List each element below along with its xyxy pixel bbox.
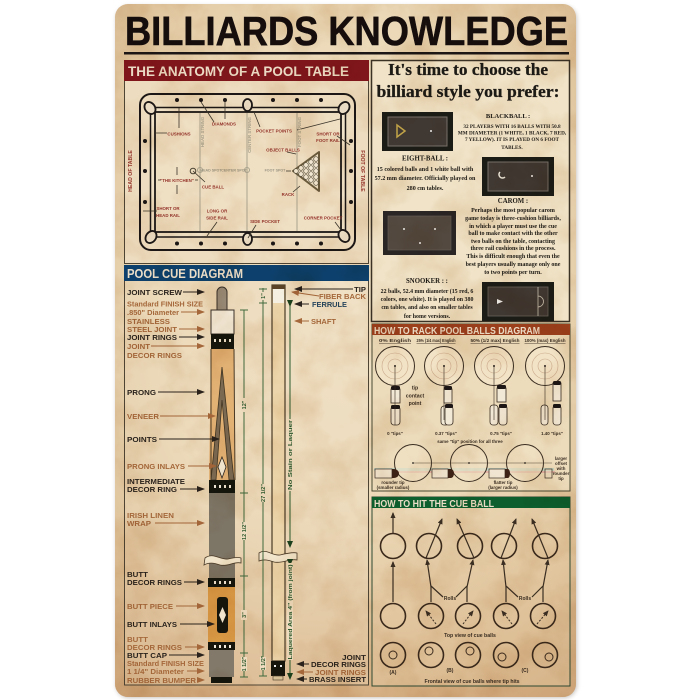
label: rolls <box>444 596 531 602</box>
pool table diagram: SHORT OR <box>156 206 180 211</box>
sign shadow <box>116 6 577 698</box>
text: carom: three rail cushions in the process. <box>470 246 556 252</box>
butt labels: JOINT SCREW <box>127 288 183 297</box>
frontal view cue balls <box>380 642 558 685</box>
rack column captions: 50% (1/2 max) English <box>470 338 520 343</box>
butt labels: INTERMEDIATE <box>127 477 185 486</box>
rack text: tip radius notes: rounder <box>553 471 570 476</box>
pool table diagram: CENTER STRING <box>247 116 252 153</box>
pool table diagram: SIDE RAIL <box>206 216 228 220</box>
pool table diagram: RACK <box>282 192 295 197</box>
cue ball circles: paths <box>380 534 558 558</box>
butt labels: STAINLESS <box>127 317 170 326</box>
shaft labels: FERRULE <box>312 300 347 309</box>
rack text: tip radius notes: flatter tip <box>494 480 513 485</box>
cue dimension lines <box>240 288 290 679</box>
rack column captions: 0% English <box>379 338 411 343</box>
rack text: tip contact point: contact <box>406 394 424 400</box>
butt labels: RUBBER BUMPER <box>127 676 197 685</box>
rack text: tips values: 1.40 "tips" <box>541 431 563 436</box>
frontal view cue balls: (A) <box>390 670 397 676</box>
heading: choose style: billiard style you prefer: <box>376 82 560 101</box>
shaft labels: JOINT RINGS <box>315 668 366 677</box>
butt labels: JOINT RINGS <box>127 333 177 342</box>
butt labels: DECOR RINGS <box>127 578 182 587</box>
text: carom: ball to make contact with the other <box>468 231 558 237</box>
butt labels: BUTT CAP <box>127 651 167 660</box>
pool table diagram: FOOT SPOT <box>265 168 286 172</box>
label: rolls: Rolls <box>444 596 456 602</box>
butt labels: DECOR RINGS <box>127 643 182 652</box>
butt labels <box>127 288 204 685</box>
text: eight-ball <box>375 156 476 192</box>
text: snooker: for home versions. <box>404 314 451 320</box>
cue diagram: assembled butt <box>204 287 241 683</box>
text: carom <box>465 198 561 276</box>
rack text: tip radius notes: rounder tip <box>381 480 405 485</box>
text: blackball: 32 PLAYERS WITH 16 BALLS WITH 50.8 <box>463 124 561 130</box>
butt labels: WRAP <box>127 519 151 528</box>
butt labels: Standard FINISH SIZE <box>127 300 203 308</box>
aged metal sign background <box>115 4 576 697</box>
pool table diagram: OBJECT BALLS <box>266 148 300 152</box>
frontal view cue balls: Frontal view of cue balls where tip hits <box>424 679 520 685</box>
rack text: tips values: 0 "tips" <box>387 431 403 436</box>
panel: pool cue diagram <box>124 265 369 685</box>
dimension labels: 1 1/2" <box>261 655 267 670</box>
butt labels: IRISH LINEN <box>127 511 174 520</box>
panel: how to hit the cue ball <box>372 497 570 686</box>
rack text: tips values <box>387 431 563 444</box>
shaft labels: TIP <box>354 285 366 294</box>
text: snooker: 22 balls, 52.4 mm diameter (15 red, 6 <box>381 288 473 295</box>
butt labels: Standard FINISH SIZE <box>127 659 204 668</box>
shaft labels: DECOR RINGS <box>311 660 366 669</box>
dimension labels: 12 1/2" <box>242 522 248 540</box>
cue diagram: shaft <box>259 285 297 680</box>
aged paper mottling overlay <box>115 4 576 697</box>
text: snooker: colors, one white). It is played on 380 <box>381 296 473 303</box>
dimension labels: 1" <box>261 293 267 299</box>
frontal view cue balls: (C) <box>522 668 529 674</box>
rack text: tip radius notes: offset <box>555 461 568 466</box>
rack text: tip radius notes: with <box>556 466 566 471</box>
rack text: tips values: same "tip" position for all three <box>437 439 503 444</box>
pool table diagram: FOOT STRING <box>297 116 302 147</box>
pool table diagram: POCKET POINTS <box>256 128 292 134</box>
heading: rack: HOW TO RACK POOL BALLS DIAGRAM <box>374 325 540 337</box>
text: snooker: cm tables, and also on smaller tables <box>381 305 473 311</box>
pool table diagram: CUSHIONS <box>167 132 191 136</box>
label: rolls: Rolls <box>519 596 531 602</box>
shaft labels: BRASS INSERT <box>309 675 366 684</box>
label: head of table: HEAD OF TABLE <box>128 150 134 192</box>
butt labels: VENEER <box>127 412 160 421</box>
rack column captions <box>379 338 566 343</box>
text: blackball: 7 YELLOW). IT IS PLAYED ON 6 FOOT <box>465 136 560 143</box>
label: foot of table: FOOT OF TABLE <box>359 150 365 192</box>
pool table diagram: SHORT OR <box>316 132 340 136</box>
shaft label arrows <box>292 289 353 679</box>
text: carom: game today is three-cushion billiards, <box>465 216 561 222</box>
table image: eight-ball <box>482 157 554 196</box>
text: eight-ball: EIGHT-BALL : <box>402 156 448 162</box>
panel: how to rack pool balls <box>372 324 570 491</box>
rack column captions: 25% (1/4 max) English <box>416 338 456 343</box>
table image: blackball <box>382 112 453 151</box>
text: blackball <box>458 113 567 151</box>
shaft labels: JOINT <box>342 653 366 662</box>
rack text: tip radius notes <box>377 456 570 490</box>
text: carom: This is difficult enough that even the <box>466 254 560 260</box>
text: snooker: SNOOKER : : <box>406 278 448 285</box>
rack text: tips values: 0.75 "tips" <box>490 431 512 436</box>
heading: anatomy: THE ANATOMY OF A POOL TABLE <box>128 63 349 79</box>
text: snooker <box>381 278 473 320</box>
table image: snooker <box>482 282 554 321</box>
heading: pool cue: POOL CUE DIAGRAM <box>127 266 243 281</box>
shaft labels: FIBER BACK <box>319 292 367 301</box>
pool table diagram: "THE KITCHEN" <box>160 178 194 183</box>
butt labels: BUTT INLAYS <box>127 620 177 629</box>
rack text: tip radius notes: tip <box>558 476 564 481</box>
butt labels: STEEL JOINT <box>127 325 177 334</box>
rack text: tip contact point: tip <box>412 386 418 392</box>
dimension labels: No Stain or Laquer <box>288 419 294 490</box>
text: carom: best players usually manage only one <box>466 262 561 268</box>
pool table diagram <box>140 94 355 250</box>
heading: choose style <box>376 60 560 101</box>
dimension labels <box>241 292 294 671</box>
text: blackball: TABLES. <box>501 145 523 151</box>
shaft labels: SHAFT <box>311 317 336 326</box>
text: carom: to two points per turn. <box>484 270 542 276</box>
butt labels: JOINT <box>127 342 150 351</box>
panel: billiard style <box>372 60 570 322</box>
pool table diagram: CENTER SPOT <box>221 168 248 172</box>
frontal view cue balls: (B) <box>447 668 454 674</box>
dimension labels: 27 1/2" <box>261 484 267 502</box>
butt labels: PRONG INLAYS <box>127 462 185 471</box>
top view cue balls <box>380 604 556 639</box>
text: carom: Perhaps the most popular carom <box>471 208 555 214</box>
rack text: tips values: 0.37 "tips" <box>435 431 457 436</box>
dimension labels: 1 1/2" <box>242 656 248 671</box>
rack text: tip radius notes: (smaller radius) <box>377 485 410 490</box>
panel: anatomy of a pool table <box>124 60 369 264</box>
text: eight-ball: 57.2 mm diameter. Officially played on <box>375 176 476 182</box>
pool table diagram: HEAD STRING <box>200 116 205 147</box>
rack text: tip contact point <box>406 386 424 407</box>
dimension labels: 12" <box>242 400 248 409</box>
butt label arrows <box>151 292 219 680</box>
text: carom: two balls on the table, contacting <box>471 239 555 245</box>
rack text: tip radius notes: (larger radius) <box>488 485 518 490</box>
shaft labels <box>309 285 367 684</box>
title: BILLIARDS KNOWLEDGE <box>125 8 568 54</box>
butt labels: DECOR RING <box>127 485 177 494</box>
pool table diagram: FOOT RAIL <box>316 138 340 143</box>
text: carom: in which a player must use the cue <box>469 224 557 230</box>
butt labels: DECOR RINGS <box>127 351 182 360</box>
butt labels: BUTT PIECE <box>127 602 173 611</box>
rack column captions: 100% (max) English <box>524 338 566 343</box>
pool table diagram: SIDE POCKET <box>250 219 280 224</box>
shot arrows <box>393 513 548 602</box>
butt labels: BUTT <box>127 570 148 579</box>
butt labels: .850" Diameter <box>127 308 179 317</box>
rack text: tip radius notes: larger <box>555 456 567 461</box>
butt labels: PRONG <box>127 388 156 397</box>
top view cue balls: Top view of cue balls <box>444 633 496 639</box>
heading: hit <box>372 497 570 510</box>
pool table diagram: HEAD RAIL <box>156 213 180 218</box>
text: blackball: MM DIAMETER (1 WHITE, 1 BLACK, 7 RED, <box>458 130 567 136</box>
butt labels: 1 1/4" Diameter <box>127 667 184 676</box>
heading: hit: HOW TO HIT THE CUE BALL <box>374 498 494 510</box>
butt labels: POINTS <box>127 435 157 444</box>
heading: pool cue <box>124 265 369 281</box>
pool table diagram: CORNER POCKET <box>304 216 343 220</box>
text: eight-ball: 280 cm tables. <box>407 186 444 192</box>
butt labels: BUTT <box>127 635 148 644</box>
rack diagram: lower tip radius <box>374 444 555 482</box>
text: eight-ball: 15 colored balls and 1 white ball with <box>377 167 474 173</box>
table image: carom <box>383 211 456 255</box>
pool table diagram: HEAD SPOT <box>201 168 222 172</box>
rack diagram: balls and cues <box>376 346 564 425</box>
dimension labels: 3" <box>242 612 248 618</box>
dimension labels: Laquered Area 4" (from joint) <box>288 564 294 660</box>
pool table diagram: DIAMONDS <box>212 122 236 126</box>
pool table diagram: LONG OR <box>207 208 228 214</box>
text: carom: CAROM : <box>498 198 528 205</box>
text: blackball: BLACKBALL : <box>486 113 530 120</box>
pool table diagram: CUE BALL <box>202 184 224 190</box>
heading: choose style: It's time to choose the <box>388 60 548 79</box>
rack text: tip contact point: point <box>409 401 422 407</box>
